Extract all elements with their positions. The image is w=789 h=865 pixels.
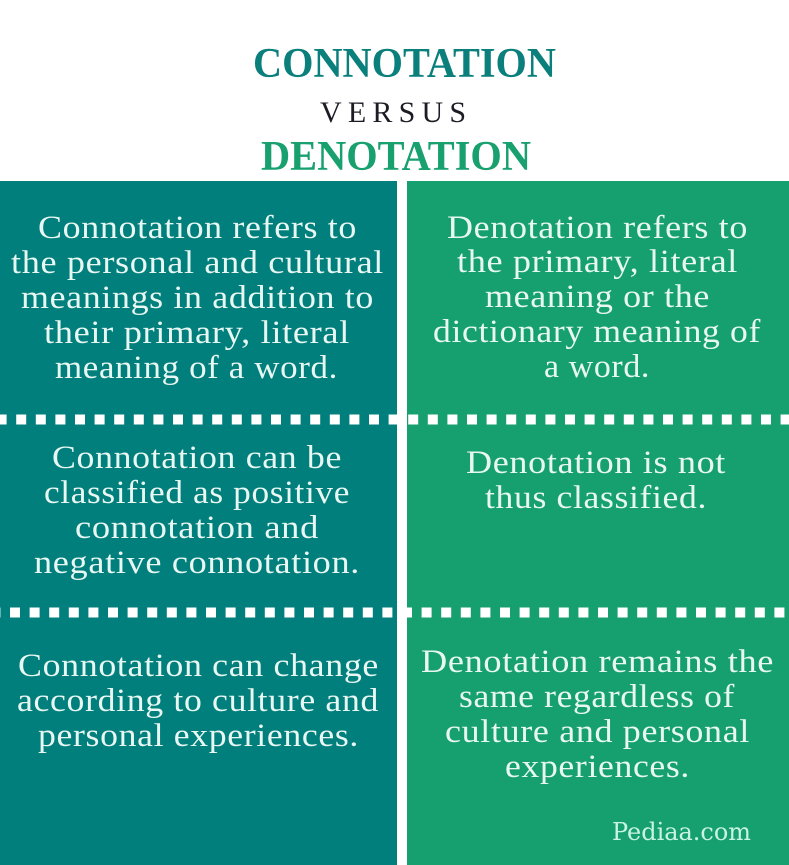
text: connotation classification	[34, 440, 360, 581]
text: connotation classification: connotation and	[75, 510, 319, 546]
panel: connotation column	[0, 181, 397, 865]
text: denotation change: same regardless of	[459, 679, 735, 715]
text: denotation classification: thus classified.	[485, 480, 707, 516]
title: connotation: CONNOTATION	[253, 41, 556, 87]
title: denotation: DENOTATION	[261, 134, 531, 180]
text: denotation definition: the primary, literal	[457, 244, 738, 280]
text: denotation definition: Denotation refers to	[447, 210, 748, 246]
text: connotation definition	[11, 210, 384, 386]
text: connotation change: personal experiences.	[38, 718, 359, 754]
text: denotation definition: a word.	[544, 349, 650, 385]
title: versus: VERSUS	[320, 96, 466, 129]
dotted divider: upper row	[0, 414, 789, 424]
text: connotation classification: Connotation can be	[52, 440, 342, 476]
text: denotation definition: dictionary meaning of	[433, 314, 761, 350]
text: connotation change: according to culture and	[17, 683, 379, 719]
text: denotation change: experiences.	[505, 749, 690, 785]
text: connotation definition: the personal and cultural	[11, 245, 384, 281]
text: connotation definition: meaning of a word.	[55, 350, 338, 386]
text: connotation definition: Connotation refers to	[38, 210, 357, 246]
logo: Pediaa.com: Pediaa.com	[612, 818, 751, 846]
panel: denotation column	[407, 181, 789, 865]
text: denotation definition	[433, 210, 761, 385]
title block	[253, 41, 556, 180]
text: connotation change: Connotation can change	[18, 648, 379, 684]
text: connotation change	[17, 648, 379, 754]
text: connotation definition: their primary, literal	[44, 315, 350, 351]
text: connotation classification: negative connotation.	[34, 545, 360, 581]
text: denotation classification	[466, 445, 726, 516]
text: denotation change: culture and personal	[445, 714, 750, 750]
dotted divider: lower row	[0, 608, 789, 618]
text: denotation definition: meaning or the	[485, 279, 710, 315]
text: denotation change: Denotation remains the	[421, 644, 774, 680]
text: denotation change	[421, 644, 774, 785]
text: connotation definition: meanings in addition to	[21, 280, 374, 316]
text: connotation classification: classified as positive	[44, 475, 350, 511]
text: denotation classification: Denotation is not	[466, 445, 726, 481]
